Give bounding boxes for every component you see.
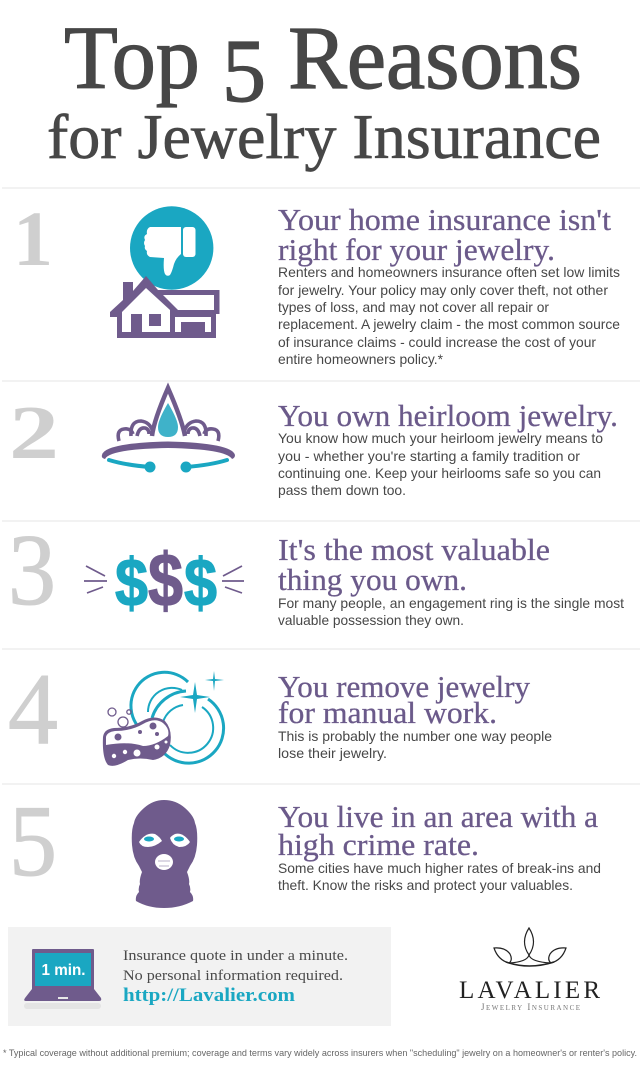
text block: http://Lavalier.com [123,985,295,1006]
heading: It's the most valuable [278,532,550,567]
icon: dollar signs: $ [115,545,148,621]
brand name: LAVALIER [459,977,600,1004]
title [47,9,601,172]
logo [459,928,600,1012]
icon: laptop: 1 min. [42,962,86,979]
panel: call to action [8,927,391,1026]
number 1: 1 [13,195,53,282]
number 5: 5 [9,785,57,898]
text block [278,264,620,367]
icon: tiara [102,388,235,472]
text block: Some cities have much higher rates of break-ins and [278,860,601,876]
panel: reason 4 [8,653,552,766]
heading: for manual work. [278,695,497,730]
number 4: 4 [8,653,58,766]
heading: high crime rate. [278,827,479,862]
text block: types of loss, and may not cover all repair or [278,299,549,315]
number 2: 2 [9,391,59,475]
text block: replacement. A jewelry claim - the most common source [278,316,620,332]
text block [278,728,552,761]
text block: for jewelry. Your policy may only cover theft, not other [278,282,608,298]
icon: dollar signs [84,538,244,622]
heading: You remove jewelry [278,669,530,704]
tagline: JEWELRY INSURANCE [481,1002,580,1012]
text block: For many people, an engagement ring is the single most [278,595,624,611]
text block: continuing one. Keep your heirlooms safe so you can [278,465,601,481]
panel: reason 2 [9,388,618,498]
icon: thumbs down and house [110,206,220,338]
text block [123,948,348,1006]
text block: of insurance claims - could increase the cost of your [278,334,596,350]
heading: right for your jewelry. [278,232,555,267]
text block: theft. Know the risks and protect your valuables. [278,877,573,893]
heading: You live in an area with a [278,799,598,834]
text block: No personal information required. [123,968,343,984]
heading [278,532,550,597]
icon: laptop [24,949,101,1009]
panel: reason 3 [8,514,624,628]
icon: sponge and clean dishes [103,671,224,766]
title: Reasons [266,9,582,108]
heading [278,202,611,267]
heading [278,669,530,730]
text block: pass them down too. [278,482,406,498]
panel: reason 5 [9,785,601,908]
icon: crown [494,928,566,966]
title: Top [64,9,203,108]
heading: Your home insurance isn't [278,202,611,237]
title: 5 [222,22,266,121]
icon: dollar signs: $ [148,538,183,622]
icon: dollar signs: $ [184,545,217,621]
text block: valuable possession they own. [278,612,464,628]
icon: balaclava [132,800,197,908]
heading: You own heirloom jewelry. [278,398,618,433]
text block [278,430,603,498]
panel: reason 1 [13,195,620,367]
text block: You know how much your heirloom jewelry means to [278,430,603,446]
number 3: 3 [8,514,56,627]
text block [278,860,601,893]
title: for Jewelry Insurance [47,102,601,172]
heading [278,799,598,862]
text block [278,595,624,628]
text block: entire homeowners policy.* [278,351,444,367]
text block: Insurance quote in under a minute. [123,948,348,964]
text block: Renters and homeowners insurance often set low limits [278,264,620,280]
text block: lose their jewelry. [278,745,387,761]
heading: thing you own. [278,562,467,597]
text block: This is probably the number one way people [278,728,552,744]
text block: you - whether you're starting a family tradition or [278,448,580,464]
